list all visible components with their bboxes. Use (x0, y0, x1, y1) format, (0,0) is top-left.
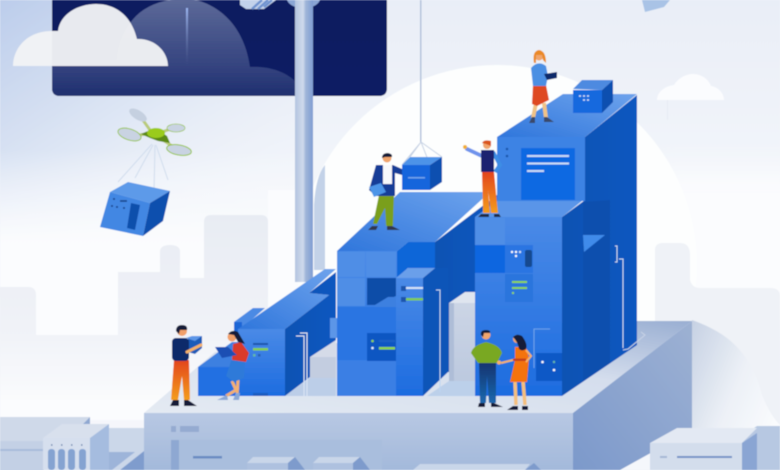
back slab (0, 417, 90, 470)
side tab (330, 318, 337, 338)
long block front (238, 329, 285, 396)
long block top (238, 269, 336, 329)
drone carrying box (100, 106, 192, 236)
dark notch (397, 242, 435, 278)
pole (287, 0, 325, 282)
small cloud right (657, 74, 724, 120)
middle front (337, 251, 397, 396)
city silhouette left (0, 190, 298, 400)
status panel (367, 333, 396, 361)
drone cables (118, 144, 168, 192)
platform (144, 321, 692, 470)
grey step (310, 340, 336, 385)
cloud mound behind platform (692, 320, 780, 470)
large white circle (297, 65, 697, 465)
tall side (562, 95, 637, 396)
hanging cube (402, 142, 442, 190)
hanging cable (420, 0, 422, 142)
screen panel (506, 148, 575, 200)
carried box (100, 182, 170, 236)
platform top (144, 321, 692, 413)
middle top (337, 192, 490, 251)
back tab (234, 308, 265, 330)
held box (188, 336, 202, 354)
grey column (427, 292, 476, 396)
person: woman in orange dress (497, 335, 531, 410)
long block side (285, 272, 336, 396)
pipe on side (615, 246, 623, 348)
tall top (497, 94, 637, 137)
left low block group (198, 269, 337, 396)
tall block (475, 94, 645, 396)
lower block top (475, 201, 582, 217)
white pipes (296, 333, 307, 396)
box on top of tower (573, 80, 613, 113)
person: man holding box (170, 325, 202, 406)
light beam (186, 8, 188, 66)
drone body (141, 128, 170, 143)
person: woman with laptop (215, 331, 249, 400)
city silhouette right (655, 243, 780, 470)
front building (43, 424, 109, 438)
low front block (198, 342, 245, 367)
person: man in blue jacket (368, 153, 402, 230)
person: woman on top (529, 50, 557, 123)
striped hatch (240, 0, 276, 9)
small front boxes (247, 457, 295, 463)
middle block (337, 192, 497, 396)
drone arms (133, 116, 178, 150)
navy sky panel (52, 0, 387, 96)
person: man with orange trousers (463, 140, 501, 217)
middle side (435, 195, 497, 372)
lower left buildings (0, 417, 144, 470)
top small cube (642, 0, 670, 12)
tall front (497, 137, 585, 201)
platform side (573, 321, 692, 470)
large cloud (13, 4, 168, 66)
lower right building (650, 426, 780, 470)
person: man in green shirt (471, 330, 503, 407)
platform front (144, 413, 573, 470)
dome (52, 0, 296, 96)
rotors (127, 106, 149, 124)
lower block front (475, 217, 562, 396)
small protruding block (396, 268, 435, 278)
